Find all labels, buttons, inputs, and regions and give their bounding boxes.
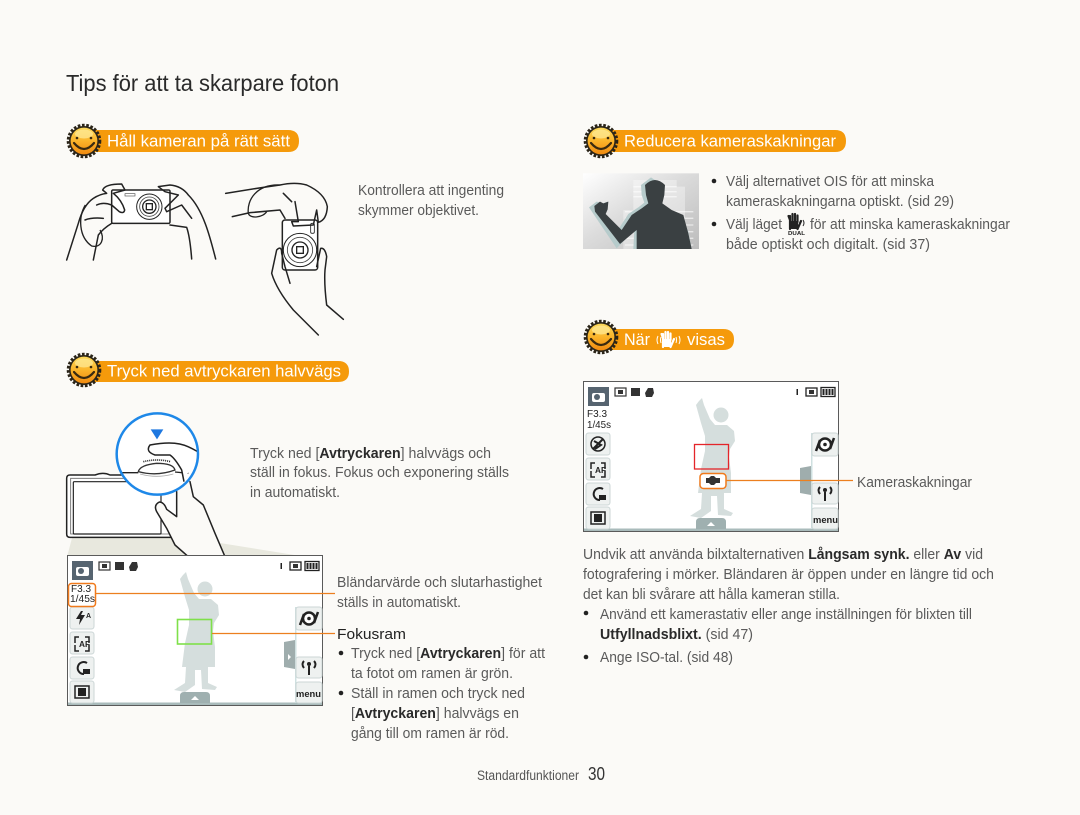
photo: shaking silhouette (583, 173, 699, 249)
text: Bländarvärde och slutarhastighet: Bländarvärde och slutarhastighet (337, 575, 542, 591)
text: Kontrollera att ingenting (358, 183, 504, 219)
text: Välj alternativet OIS: för att minska kameraskakningar (810, 217, 1010, 233)
text: Undvik att använda (583, 547, 994, 666)
text: Fokusram list: Fokusram (337, 627, 406, 643)
heading: Reducera kameraskakningar (585, 125, 846, 157)
text: Undvik att använda: Använd ett kamerastativ eller ange inställningen för blixten till (600, 607, 972, 623)
text: Undvik att använda: Utfyllnadsblixt. (sid 47) (600, 627, 753, 643)
text: Välj alternativet OIS: kameraskakningarna optiskt. (sid 29) (726, 194, 954, 210)
text: Bländarvärde och slutarhastighet: ställs in automatiskt. (337, 595, 461, 611)
camera screen: focus frame and aperture: AF (79, 640, 90, 649)
text: Bländarvärde och slutarhastighet (337, 575, 542, 611)
heading: Håll kameran på rätt sätt: Håll kameran på rätt sätt (107, 132, 290, 150)
title: Tips för att ta skarpare foton (66, 70, 339, 96)
footer: page number (477, 764, 605, 784)
text: Tryck ned Avtryckaren halvvägs (250, 446, 509, 501)
heading: Tryck ned avtryckaren halvvägs (68, 354, 349, 386)
illustration: pressing the shutter halfway (67, 413, 307, 557)
camera screen: focus frame and aperture: menu (296, 689, 321, 699)
text: Tryck ned Avtryckaren halvvägs: in automatiskt. (250, 485, 340, 501)
text: Fokusram list: ta fotot om ramen är grön. (351, 666, 513, 682)
camera screen: focus frame and aperture: 1/45s (70, 593, 95, 605)
illustration: vertical camera grip (226, 183, 343, 335)
text: Välj alternativet OIS (712, 174, 1010, 253)
heading: När hand visas (585, 321, 734, 353)
camera screen: shake warning (584, 382, 853, 532)
text: Undvik att använda: Ange ISO-tal. (sid 48) (600, 650, 733, 666)
heading: Reducera kameraskakningar: Reducera kameraskakningar (624, 132, 836, 150)
illustration: two-hand horizontal camera grip (67, 184, 216, 260)
camera screen: shake warning: F3.3 (587, 408, 607, 420)
text: Tryck ned Avtryckaren halvvägs: Tryck ned [Avtryckaren] halvvägs och (250, 446, 491, 462)
heading: När hand visas: visas (687, 330, 725, 349)
icon: dual IS hand (788, 214, 806, 237)
text: Välj alternativet OIS: både optiskt och digitalt. (sid 37) (726, 237, 930, 253)
camera screen: shake warning: AF (595, 466, 606, 475)
footer: page number: 30 (588, 764, 605, 784)
text: Välj alternativet OIS: Välj läget (726, 217, 782, 233)
text: Välj alternativet OIS: Välj alternativet OIS för att minska (726, 174, 935, 190)
text: Undvik att använda: fotografering i mörker. Bländaren är öppen under en längre tid och (583, 567, 994, 583)
camera screen: shake warning: menu (813, 515, 838, 525)
text: Fokusram list: Ställ in ramen och tryck ned (351, 686, 525, 702)
heading: Tryck ned avtryckaren halvvägs: Tryck ned avtryckaren halvvägs (107, 362, 341, 380)
camera screen: focus frame and aperture: F3.3 (71, 583, 91, 595)
text: Undvik att använda: det kan bli svårare att hålla kameran stilla. (583, 587, 840, 603)
heading: Håll kameran på rätt sätt (68, 125, 299, 157)
text: Kontrollera att ingenting: skymmer objektivet. (358, 203, 479, 219)
icon: dual IS hand: DUAL (788, 231, 806, 237)
text: Tryck ned Avtryckaren halvvägs: ställ in fokus. Fokus och exponering ställs (250, 465, 509, 481)
camera screen: focus frame and aperture: A (86, 613, 91, 620)
text: Undvik att använda: Undvik att använda bilxtalternativen Långsam synk. eller Av vid (583, 547, 983, 563)
text: Fokusram list: Tryck ned [Avtryckaren] för att (351, 646, 545, 662)
text: Kontrollera att ingenting: Kontrollera att ingenting (358, 183, 504, 199)
text: Fokusram list (337, 627, 545, 742)
text: Fokusram list: [Avtryckaren] halvvägs en (351, 706, 519, 722)
camera screen: focus frame and aperture (68, 556, 335, 706)
text: Fokusram list: gång till om ramen är röd. (351, 726, 509, 742)
camera screen: shake warning: 1/45s (587, 419, 611, 431)
footer: page number: Standardfunktioner (477, 768, 579, 783)
heading: När hand visas: När (624, 330, 650, 349)
label: Kameraskakningar: Kameraskakningar (857, 475, 972, 491)
